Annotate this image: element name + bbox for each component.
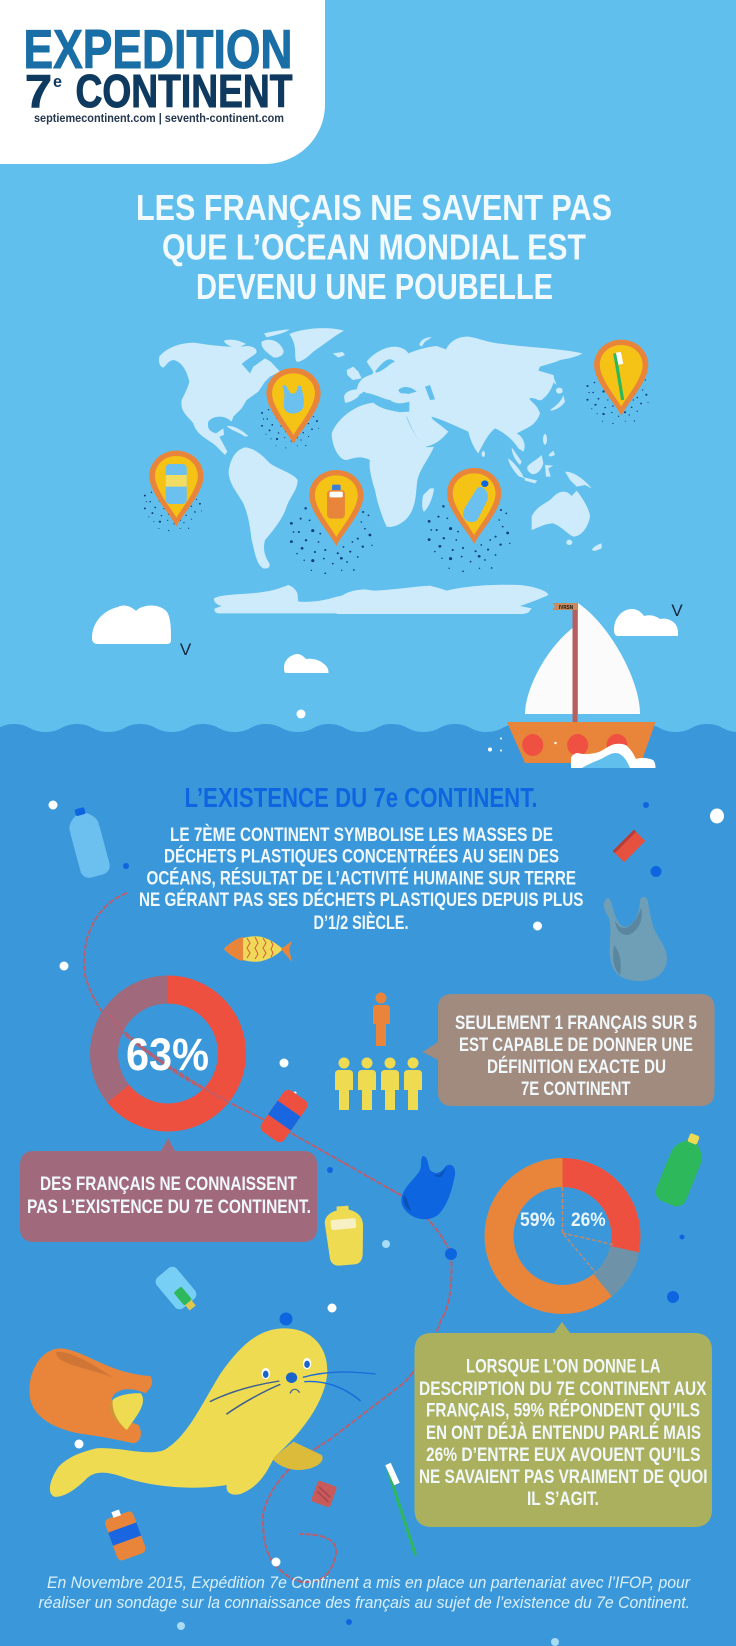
left sail bbox=[525, 628, 572, 714]
icon: fish bbox=[224, 936, 292, 962]
pin: plastic bag bbox=[261, 368, 321, 449]
section heading: L’EXISTENCE DU 7e CONTINENT. bbox=[184, 782, 538, 813]
label 59%: 59% bbox=[520, 1209, 555, 1231]
orange bag on the seal bbox=[29, 1348, 152, 1443]
droplet above sea bbox=[296, 710, 306, 718]
bird left: V bbox=[180, 640, 192, 659]
logo: Expedition: EXPEDITION bbox=[24, 18, 292, 80]
callout: one in five bbox=[422, 994, 714, 1106]
donut value: 63% bbox=[126, 1029, 209, 1080]
world map with pins bbox=[144, 328, 649, 614]
callout: 63 percent description: PAS L’EXISTENCE DU 7E CONTINENT. bbox=[27, 1197, 311, 1218]
intro paragraph: NE GÉRANT PAS SES DÉCHETS PLASTIQUES DEPUIS PLUS bbox=[139, 889, 584, 911]
intro paragraph: OCÉANS, RÉSULTAT DE L’ACTIVITÉ HUMAINE SUR TERRE bbox=[146, 868, 576, 890]
intro paragraph bbox=[139, 824, 584, 934]
donut chart 63% bbox=[104, 990, 232, 1118]
logo: 7e Continent: 7 bbox=[25, 65, 52, 117]
intro paragraph: LE 7ÈME CONTINENT SYMBOLISE LES MASSES DE bbox=[170, 824, 553, 846]
boat hull bbox=[507, 722, 656, 763]
icon: orange spray can bbox=[102, 1505, 147, 1562]
map: Eurasia, Africa, Oceania bbox=[332, 337, 602, 614]
seal illustration bbox=[29, 1328, 376, 1497]
logo: 7e Continent: CONTINENT bbox=[76, 65, 292, 117]
callout: one in five: DÉFINITION EXACTE DU bbox=[487, 1056, 666, 1078]
boat foam bbox=[571, 744, 656, 768]
icon: one in five people bbox=[335, 992, 422, 1110]
plastic string bbox=[84, 893, 451, 1582]
small light blue bottle bbox=[153, 1264, 203, 1316]
donut chart 59 / 26 percent bbox=[499, 1172, 626, 1300]
seal nose and mouth bbox=[286, 1372, 300, 1393]
title: DEVENU UNE POUBELLE bbox=[196, 266, 553, 307]
donut dashes bbox=[562, 1187, 615, 1273]
string over donut bbox=[110, 1015, 230, 1103]
title: LES FRANÇAIS NE SAVENT PAS bbox=[136, 187, 612, 228]
right sail bbox=[578, 603, 640, 714]
logo panel bbox=[0, 0, 325, 164]
icon: grey plastic bag bbox=[604, 897, 667, 981]
label 26%: 26% bbox=[571, 1209, 606, 1231]
bird right: V bbox=[671, 601, 683, 620]
cloud centre bbox=[284, 654, 328, 673]
sea with waves bbox=[0, 724, 736, 1646]
seal eyes bbox=[262, 1358, 311, 1379]
icon: green bottle bbox=[653, 1129, 710, 1209]
icon: blue plastic bag bbox=[401, 1156, 455, 1219]
icon: dark red eraser bbox=[311, 1480, 337, 1508]
logo: 7e Continent bbox=[25, 65, 292, 117]
pin: jar bbox=[290, 470, 373, 574]
footer note bbox=[38, 1574, 691, 1612]
callout: description result bbox=[414, 1322, 712, 1527]
yellow people bbox=[335, 1058, 422, 1110]
title: QUE L’OCEAN MONDIAL EST bbox=[162, 226, 586, 268]
mast bbox=[572, 603, 578, 723]
callout: 63 percent description: DES FRANÇAIS NE CONNAISSENT bbox=[40, 1174, 297, 1195]
pin: toothbrush bbox=[586, 340, 649, 424]
footer note: En Novembre 2015, Expédition 7e Continent a mis en place un partenariat avec l’IFOP, pour bbox=[47, 1574, 691, 1592]
cloud right bbox=[614, 609, 678, 636]
seal whiskers bbox=[210, 1372, 376, 1414]
icon: red eraser bbox=[613, 830, 645, 862]
sailboat sails and mast bbox=[525, 603, 640, 723]
callout: description result: IL S’AGIT. bbox=[527, 1489, 599, 1510]
callout: description result: LORSQUE L’ON DONNE LA bbox=[466, 1357, 661, 1378]
intro paragraph: D’1/2 SIÈCLE. bbox=[314, 912, 408, 934]
footer note: réaliser un sondage sur la connaissance des français au sujet de l’existence du 7e Continent. bbox=[38, 1594, 690, 1612]
cloud left bbox=[92, 606, 171, 644]
icon: light blue bottle bbox=[65, 804, 112, 880]
boat splash droplets bbox=[488, 738, 557, 752]
flag: IVRSN bbox=[559, 605, 573, 611]
pin: cup bbox=[144, 451, 204, 531]
map: Americas and west bbox=[159, 328, 370, 613]
seal back flipper bbox=[272, 1442, 323, 1470]
icon: red and blue can bbox=[258, 1087, 310, 1145]
callout: one in five: 7E CONTINENT bbox=[521, 1079, 631, 1100]
icon: toothbrush bbox=[388, 1464, 416, 1555]
orange person bbox=[373, 992, 390, 1046]
logo: website addresses: septiemecontinent.com | seventh-continent.com bbox=[34, 111, 284, 125]
logo: 7e Continent: e bbox=[53, 72, 62, 91]
callout: 63 percent description bbox=[20, 1138, 317, 1242]
intro paragraph: DÉCHETS PLASTIQUES CONCENTRÉES AU SEIN DES bbox=[164, 846, 559, 868]
pin: bottle bbox=[428, 468, 511, 572]
floating dots bbox=[48, 800, 724, 1646]
icon: yellow bottle bbox=[323, 1204, 366, 1267]
map pins bbox=[144, 340, 649, 574]
title bbox=[136, 187, 612, 307]
seal body bbox=[50, 1328, 327, 1497]
